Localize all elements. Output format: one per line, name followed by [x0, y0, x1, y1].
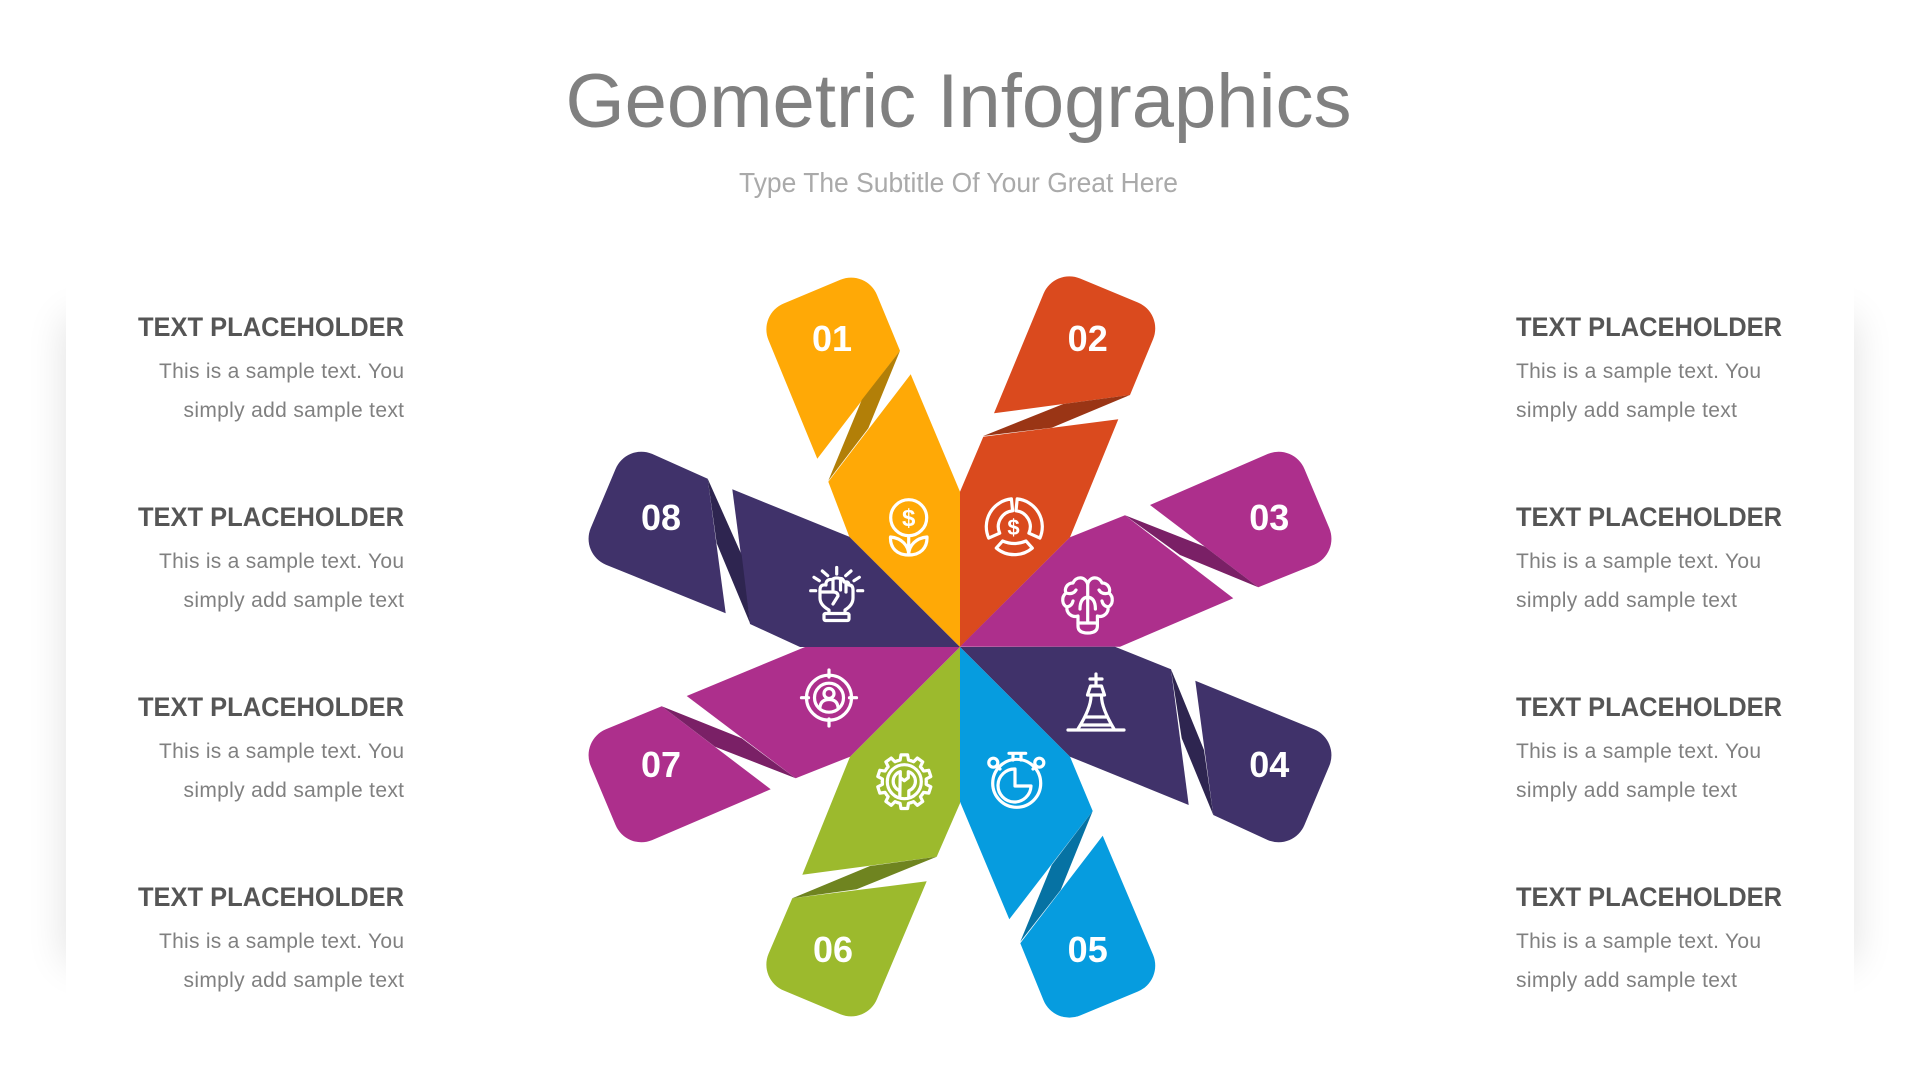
text block: left 1: simply add sample text: [184, 399, 404, 422]
text block: right 3: TEXT PLACEHOLDER: [1516, 692, 1782, 722]
icon: flower dollar: $: [902, 505, 916, 532]
icon: target person: [802, 670, 856, 726]
text block: right 2: simply add sample text: [1516, 589, 1737, 612]
petal 08 navy: 08: [641, 497, 681, 538]
icon: chess king: [1068, 674, 1124, 730]
text block: left 3: simply add sample text: [184, 779, 404, 802]
petal 02 orange: 02: [1068, 318, 1108, 359]
icon: brain bulb: [1063, 578, 1112, 633]
text block: right 1: TEXT PLACEHOLDER: [1516, 312, 1782, 342]
petal 06 green: [766, 647, 960, 1016]
text block: right 2: TEXT PLACEHOLDER: [1516, 502, 1782, 532]
petal 01 yellow: [766, 278, 960, 647]
text block: right 4: [1516, 882, 1782, 992]
petal 05 blue: [960, 647, 1155, 1018]
petal 03 magenta: 03: [1249, 497, 1289, 538]
text block: right 4: TEXT PLACEHOLDER: [1516, 882, 1782, 912]
text block: right 3: simply add sample text: [1516, 779, 1737, 802]
icon: gear wrench: [877, 755, 932, 808]
icon: stopwatch: [989, 753, 1044, 807]
text block: left 4: TEXT PLACEHOLDER: [138, 882, 404, 912]
text block: right 3: [1516, 692, 1782, 802]
petal 07 magenta: 07: [641, 744, 681, 785]
text block: left 4: This is a sample text. You: [159, 930, 404, 953]
text block: left 2: [138, 502, 404, 612]
icon: raised fist: [811, 568, 863, 620]
text block: left 4: [138, 882, 404, 992]
petal 08 navy: [589, 452, 960, 647]
text block: left 1: This is a sample text. You: [159, 360, 404, 383]
text block: right 1: [1516, 312, 1782, 422]
text block: left 2: simply add sample text: [184, 589, 404, 612]
text block: right 1: simply add sample text: [1516, 399, 1737, 422]
petal 04 navy: [960, 647, 1331, 842]
text block: left 3: This is a sample text. You: [159, 740, 404, 763]
petal 06 green: 06: [813, 929, 853, 970]
text block: right 2: This is a sample text. You: [1516, 550, 1761, 573]
text block: right 1: This is a sample text. You: [1516, 360, 1761, 383]
text block: left 1: [138, 312, 404, 422]
text block: right 3: This is a sample text. You: [1516, 740, 1761, 763]
petal 01 yellow: 01: [812, 318, 852, 359]
text block: right 2: [1516, 502, 1782, 612]
petal 03 magenta: [960, 452, 1331, 647]
icon: segmented dollar ring: [986, 499, 1042, 555]
text block: left 2: This is a sample text. You: [159, 550, 404, 573]
icon: flower dollar: [890, 500, 927, 555]
petal 07 magenta: [589, 647, 960, 842]
text block: right 4: simply add sample text: [1516, 969, 1737, 992]
text block: left 1: TEXT PLACEHOLDER: [138, 312, 404, 342]
text block: right 4: This is a sample text. You: [1516, 930, 1761, 953]
petal 04 navy: 04: [1249, 744, 1289, 785]
text block: left 4: simply add sample text: [184, 969, 404, 992]
text block: left 2: TEXT PLACEHOLDER: [138, 502, 404, 532]
petal 05 blue: 05: [1068, 929, 1108, 970]
petal 02 orange: [960, 276, 1155, 647]
subtitle: Type The Subtitle Of Your Great Here: [739, 167, 1178, 198]
text block: left 3: TEXT PLACEHOLDER: [138, 692, 404, 722]
icon: segmented dollar ring: $: [1007, 515, 1020, 540]
title: Geometric Infographics: [566, 59, 1352, 144]
text block: left 3: [138, 692, 404, 802]
